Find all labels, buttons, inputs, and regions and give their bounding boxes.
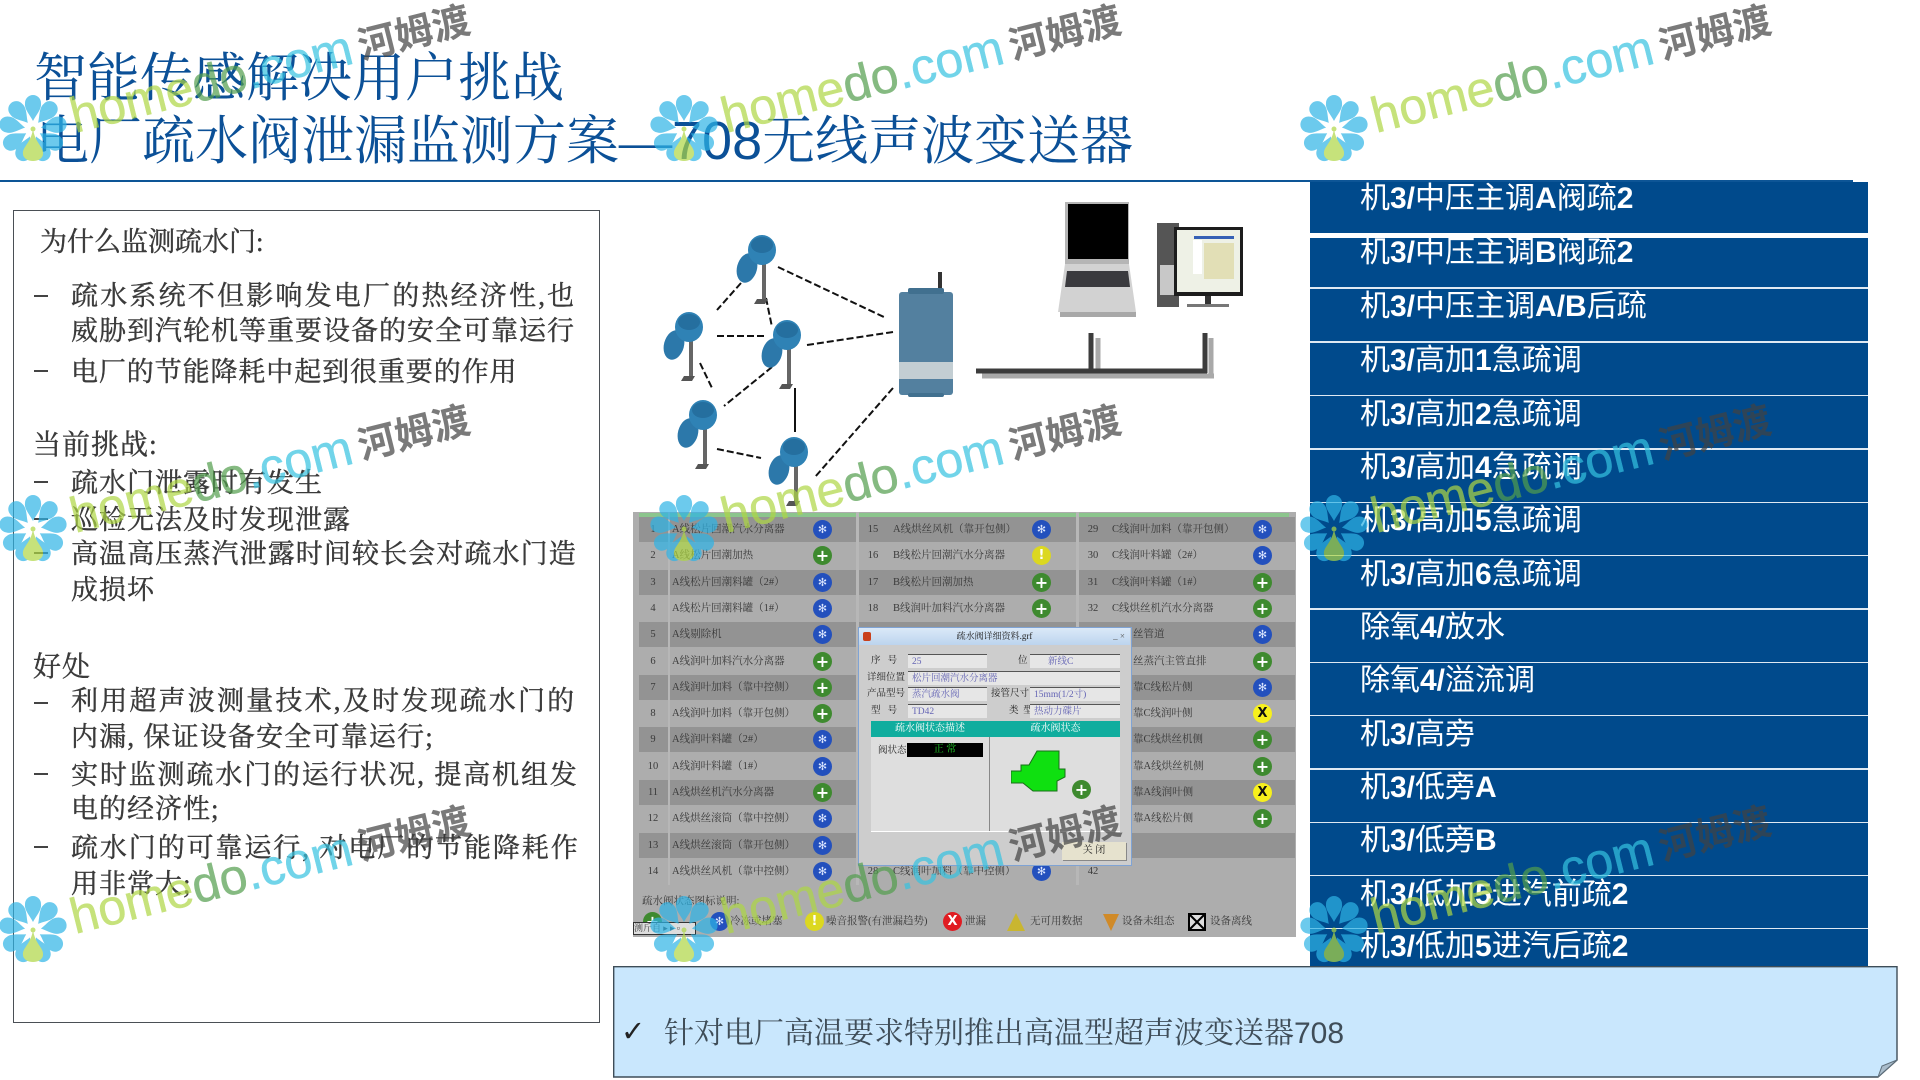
status display <box>878 743 983 757</box>
status panels <box>871 737 1120 832</box>
legend icons: ✻ <box>715 915 724 928</box>
watermark middle centre <box>649 390 1126 564</box>
table rows: 7 <box>650 682 656 693</box>
icon: green valve <box>1011 750 1066 792</box>
table rows: 9 <box>650 734 656 745</box>
panel: why monitor, challenges, benefits <box>13 210 600 1023</box>
table rows: X <box>1257 706 1268 721</box>
dialog fields: 接管尺寸 <box>991 689 1029 699</box>
dialog title bar <box>859 628 1130 645</box>
list background block <box>1310 182 1868 966</box>
table rows: ✻ <box>1258 628 1267 641</box>
table rows: 靠C线松片侧 <box>1133 682 1193 693</box>
text: why monitor bullets <box>34 281 576 387</box>
table rows: ✻ <box>1258 549 1267 562</box>
heading: benefits: 好处 <box>33 652 91 683</box>
dialog fields: 序 号 <box>871 656 897 666</box>
watermark middle centre: 河姆渡 <box>1005 400 1126 468</box>
dialog fields: 松片回潮汽水分离器 <box>912 674 998 684</box>
title line 1: 智能传感解决用户挑战 <box>34 50 564 108</box>
watermark bottom right <box>1299 791 1776 965</box>
text: benefits bullets: 利用超声波测量技术,及时发现疏水门的 <box>71 686 576 716</box>
table rows: A线剔除机 <box>672 629 722 640</box>
legend icons: 噪音报警(有泄漏趋势) <box>826 916 928 927</box>
list background block: 机3/低加5进汽后疏2 <box>1360 921 1628 965</box>
table rows: C线润叶加料（靠开包侧） <box>1112 524 1235 535</box>
table rows: A线润叶加料（靠开包侧） <box>672 708 795 719</box>
table rows: 丝管道 <box>1133 629 1164 640</box>
table rows: ✻ <box>818 523 827 536</box>
table rows: B线松片回潮汽水分离器 <box>893 550 1005 561</box>
dialog title bar: 疏水阀详细资料.grf <box>957 631 1032 641</box>
icon: laptop <box>1058 202 1136 317</box>
table rows: A线烘丝滚筒（靠中控侧） <box>672 813 795 824</box>
watermark top centre: homedo.com <box>715 19 1009 144</box>
legend icons: 泄漏 <box>965 916 986 927</box>
table rows: 丝蒸汽主管直排 <box>1133 656 1206 666</box>
heading: why monitor: 为什么监测疏水门: <box>40 227 264 257</box>
table rows: + <box>816 678 829 697</box>
list background block: 机3/高加2急疏调 <box>1360 389 1582 433</box>
table rows: 5 <box>650 629 656 640</box>
watermark bottom centre: 河姆渡 <box>1005 801 1126 869</box>
dialog fields: 25 <box>912 657 922 667</box>
dialog fields: TD42 <box>912 707 934 717</box>
table rows: 42 <box>1088 866 1098 877</box>
legend icons: 冷冻或堵塞 <box>730 916 782 927</box>
list background block: 机3/低旁B <box>1360 815 1497 859</box>
callout: high-temperature transmitter <box>613 966 1898 1078</box>
icon: wireless gateway <box>899 272 953 397</box>
text: challenges bullets: 成损坏 <box>71 575 155 605</box>
legend icons <box>633 912 1252 935</box>
dialog fields: 热动力碟片 <box>1034 707 1082 717</box>
legend icons: 测斤自 ▸ ▸ ▫ <box>634 923 680 933</box>
table rows: 28 <box>868 866 878 877</box>
legend icons: X <box>947 914 958 929</box>
table rows: 6 <box>650 656 656 666</box>
table rows: 12 <box>648 813 658 824</box>
text: challenges bullets: 巡检无法及时发现泄露 <box>71 505 351 535</box>
text: benefits bullets: 电的经济性; <box>71 794 220 824</box>
table rows: ✻ <box>818 839 827 852</box>
dialog title bar: _ × <box>1113 631 1125 641</box>
table rows: A线润叶料罐（1#） <box>672 761 764 772</box>
list background block: 机3/高加4急疏调 <box>1360 442 1582 486</box>
watermark top centre <box>649 0 1126 164</box>
dialog fields: 蒸汽疏水阀 <box>912 690 960 700</box>
table rows: ✻ <box>1037 523 1046 536</box>
watermark top left: homedo.com <box>64 19 358 144</box>
table rows: + <box>1256 809 1269 828</box>
text: why monitor bullets: 电厂的节能降耗中起到很重要的作用 <box>71 357 517 387</box>
table rows: + <box>1035 599 1048 618</box>
table rows: C线润叶料罐（2#） <box>1112 550 1203 561</box>
text: challenges bullets <box>34 468 577 605</box>
text: challenges bullets: 疏水门泄露时有发生 <box>71 468 323 498</box>
close button <box>1062 842 1126 860</box>
title <box>34 50 1133 171</box>
watermark middle right <box>1299 390 1776 564</box>
table rows: ✻ <box>1258 681 1267 694</box>
list background block: 机3/中压主调B阀疏2 <box>1360 227 1633 271</box>
watermark top right: 河姆渡 <box>1655 0 1776 68</box>
watermark middle right: 河姆渡 <box>1655 400 1776 468</box>
table rows: ✻ <box>818 602 827 615</box>
text: benefits bullets: 用非常大; <box>71 869 192 899</box>
table rows: + <box>816 652 829 670</box>
table rows: A线润叶加料汽水分离器 <box>672 656 785 666</box>
list: monitored drain valves <box>1310 182 1868 966</box>
list background block: 机3/高加1急疏调 <box>1360 335 1582 379</box>
table rows: ✻ <box>818 576 827 589</box>
watermark top left <box>0 0 475 164</box>
text: benefits bullets <box>34 686 580 899</box>
status headers: 疏水阀状态 <box>1030 723 1080 734</box>
list background block: 机3/高加5急疏调 <box>1360 495 1582 539</box>
table rows: 靠A线松片侧 <box>1133 813 1193 824</box>
list background block: 除氧4/放水 <box>1360 602 1505 646</box>
table rows: A线松片回潮汽水分离器 <box>672 524 785 535</box>
table rows: + <box>1256 730 1269 749</box>
table rows: + <box>1035 573 1048 592</box>
legend icons: 设备离线 <box>1210 916 1252 927</box>
watermark middle left <box>0 390 475 564</box>
table rows: 30 <box>1088 550 1098 561</box>
table rows: C线润叶料罐（1#） <box>1112 577 1203 588</box>
table rows: B线润叶加料汽水分离器 <box>893 603 1005 614</box>
heading: current challenges: 当前挑战: <box>33 430 158 461</box>
watermark middle left: homedo.com <box>64 419 358 544</box>
list background block: 机3/高旁 <box>1360 709 1475 753</box>
dialog fields: 新线C <box>1048 657 1073 667</box>
table rows: 14 <box>648 866 658 877</box>
table rows: X <box>1257 785 1268 800</box>
table rows: ✻ <box>1258 523 1267 536</box>
table rows: + <box>1256 652 1269 670</box>
text: benefits bullets: 内漏, 保证设备安全可靠运行; <box>71 722 434 752</box>
table rows: A线烘丝滚筒（靠开包侧） <box>672 840 795 851</box>
text: why monitor bullets: 威胁到汽轮机等重要设备的安全可靠运行 <box>71 316 575 346</box>
dialog fields: 详细位置 <box>867 673 905 683</box>
title line 2: 电厂疏水阀泄漏监测方案—708无线声波变送器 <box>36 111 1133 171</box>
table rows: A线松片回潮加热 <box>672 550 753 561</box>
icons: wireless transmitters <box>660 235 808 506</box>
table rows: 靠C线烘丝机侧 <box>1133 734 1203 745</box>
watermark bottom left: homedo.com <box>64 820 358 945</box>
dialog fields: 型 号 <box>871 706 897 716</box>
check mark: ✓ <box>621 1014 645 1048</box>
table rows: A线润叶加料（靠中控侧） <box>672 682 795 693</box>
monitoring software screenshot <box>633 512 1296 937</box>
list background block: 机3/低旁A <box>1360 762 1497 806</box>
table rows: 31 <box>1088 577 1098 588</box>
table rows: ✻ <box>818 865 827 878</box>
table rows: ✻ <box>818 812 827 825</box>
legend icons: + <box>646 912 659 931</box>
dialog fields: 类 型 <box>1009 706 1033 716</box>
table rows: 11 <box>648 787 658 798</box>
list background block: 除氧4/溢流调 <box>1360 655 1535 699</box>
table rows: 3 <box>650 577 656 588</box>
watermark middle left: 河姆渡 <box>354 400 475 468</box>
table rows: B线松片回潮加热 <box>893 577 974 588</box>
table rows: ✻ <box>818 628 827 641</box>
table rows: 靠A线烘丝机侧 <box>1133 761 1204 772</box>
icon: status ok: + <box>1075 780 1088 799</box>
watermark top left: 河姆渡 <box>354 0 475 68</box>
table rows: A线润叶料罐（2#） <box>672 734 764 745</box>
dialog fields: 位 置 <box>1018 656 1042 666</box>
legend title: 疏水阀状态图标说明: <box>642 896 739 907</box>
icon: desktop computer <box>1157 223 1243 307</box>
table rows: 10 <box>648 761 658 772</box>
table rows: 15 <box>868 524 878 535</box>
table rows: 2 <box>650 550 656 561</box>
text: benefits bullets: 实时监测疏水门的运行状况, 提高机组发 <box>71 760 579 790</box>
dialog window: valve detail <box>858 627 1132 866</box>
table rows: C线烘丝机汽水分离器 <box>1112 603 1214 614</box>
table rows: 4 <box>650 603 656 614</box>
table rows: 靠C线润叶侧 <box>1133 708 1193 719</box>
table rows: 8 <box>650 708 656 719</box>
table rows: 13 <box>648 840 658 851</box>
watermark top right <box>1299 0 1776 164</box>
list background block: 机3/中压主调A/B后疏 <box>1360 281 1647 325</box>
table rows: + <box>1256 757 1269 776</box>
table rows: 1 <box>650 524 656 535</box>
table rows: ✻ <box>818 760 827 773</box>
network diagram <box>664 202 1243 506</box>
title rule <box>0 180 1853 182</box>
watermark top right: homedo.com <box>1365 19 1659 144</box>
legend icons: ! <box>812 914 817 929</box>
watermark bottom centre <box>649 791 1126 965</box>
watermark bottom right: 河姆渡 <box>1655 801 1776 869</box>
dialog fields: 产品型号 <box>867 689 905 699</box>
table rows: + <box>1256 573 1269 592</box>
table rows: A线烘丝机汽水分离器 <box>672 787 774 798</box>
table rows: A线松片回潮料罐（2#） <box>672 577 785 588</box>
legend icons: 设备未组态 <box>1122 916 1174 927</box>
table rows: + <box>816 783 829 802</box>
status display: 正 常 <box>934 744 956 755</box>
watermark bottom left: 河姆渡 <box>354 801 475 869</box>
text: why monitor bullets: 疏水系统不但影响发电厂的热经济性,也 <box>71 281 576 311</box>
table rows <box>639 517 1295 881</box>
list background block: 机3/高加6急疏调 <box>1360 549 1582 593</box>
list background block: 机3/低加5进汽前疏2 <box>1360 869 1628 913</box>
table rows: 16 <box>868 550 878 561</box>
table rows: 靠A线润叶侧 <box>1133 787 1193 798</box>
status display: 阀状态 <box>878 746 907 756</box>
table rows: A线烘丝风机（靠开包侧） <box>893 524 1016 535</box>
table rows: C线润叶加料（靠中控侧） <box>893 866 1016 877</box>
table rows: ! <box>1039 548 1044 563</box>
table rows: 29 <box>1088 524 1098 535</box>
table rows: ✻ <box>1037 865 1046 878</box>
table rows: A线松片回潮料罐（1#） <box>672 603 785 614</box>
table rows: + <box>816 704 829 723</box>
table rows: + <box>816 546 829 565</box>
legend icons: 无可用数据 <box>1030 916 1082 927</box>
watermark middle right: homedo.com <box>1365 419 1659 544</box>
dialog fields <box>867 654 1120 718</box>
table rows: ✻ <box>818 733 827 746</box>
text: challenges bullets: 高温高压蒸汽泄露时间较长会对疏水门造 <box>71 539 577 569</box>
close button: 关 闭 <box>1083 845 1105 856</box>
dashed wireless links <box>700 267 893 477</box>
table rows: A线烘丝风机（靠中控侧） <box>672 866 795 877</box>
callout text: 针对电厂高温要求特别推出高温型超声波变送器708 <box>664 1017 1344 1050</box>
status headers <box>871 721 1120 737</box>
text: benefits bullets: 疏水门的可靠运行, 对电厂的节能降耗作 <box>71 833 580 863</box>
table rows: 32 <box>1088 603 1098 614</box>
wired network bus <box>976 333 1214 378</box>
watermark middle centre: homedo.com <box>715 419 1009 544</box>
watermark bottom left <box>0 791 475 965</box>
table rows: 17 <box>868 577 878 588</box>
callout shape <box>613 966 1898 1078</box>
watermark bottom right: homedo.com <box>1365 820 1659 945</box>
watermark top centre: 河姆渡 <box>1005 0 1126 68</box>
watermark bottom centre: homedo.com <box>715 820 1009 945</box>
table rows: 18 <box>868 603 878 614</box>
table rows: + <box>1256 599 1269 618</box>
dialog fields: 15mm(1/2寸) <box>1034 690 1086 700</box>
status headers: 疏水阀状态描述 <box>895 723 965 734</box>
